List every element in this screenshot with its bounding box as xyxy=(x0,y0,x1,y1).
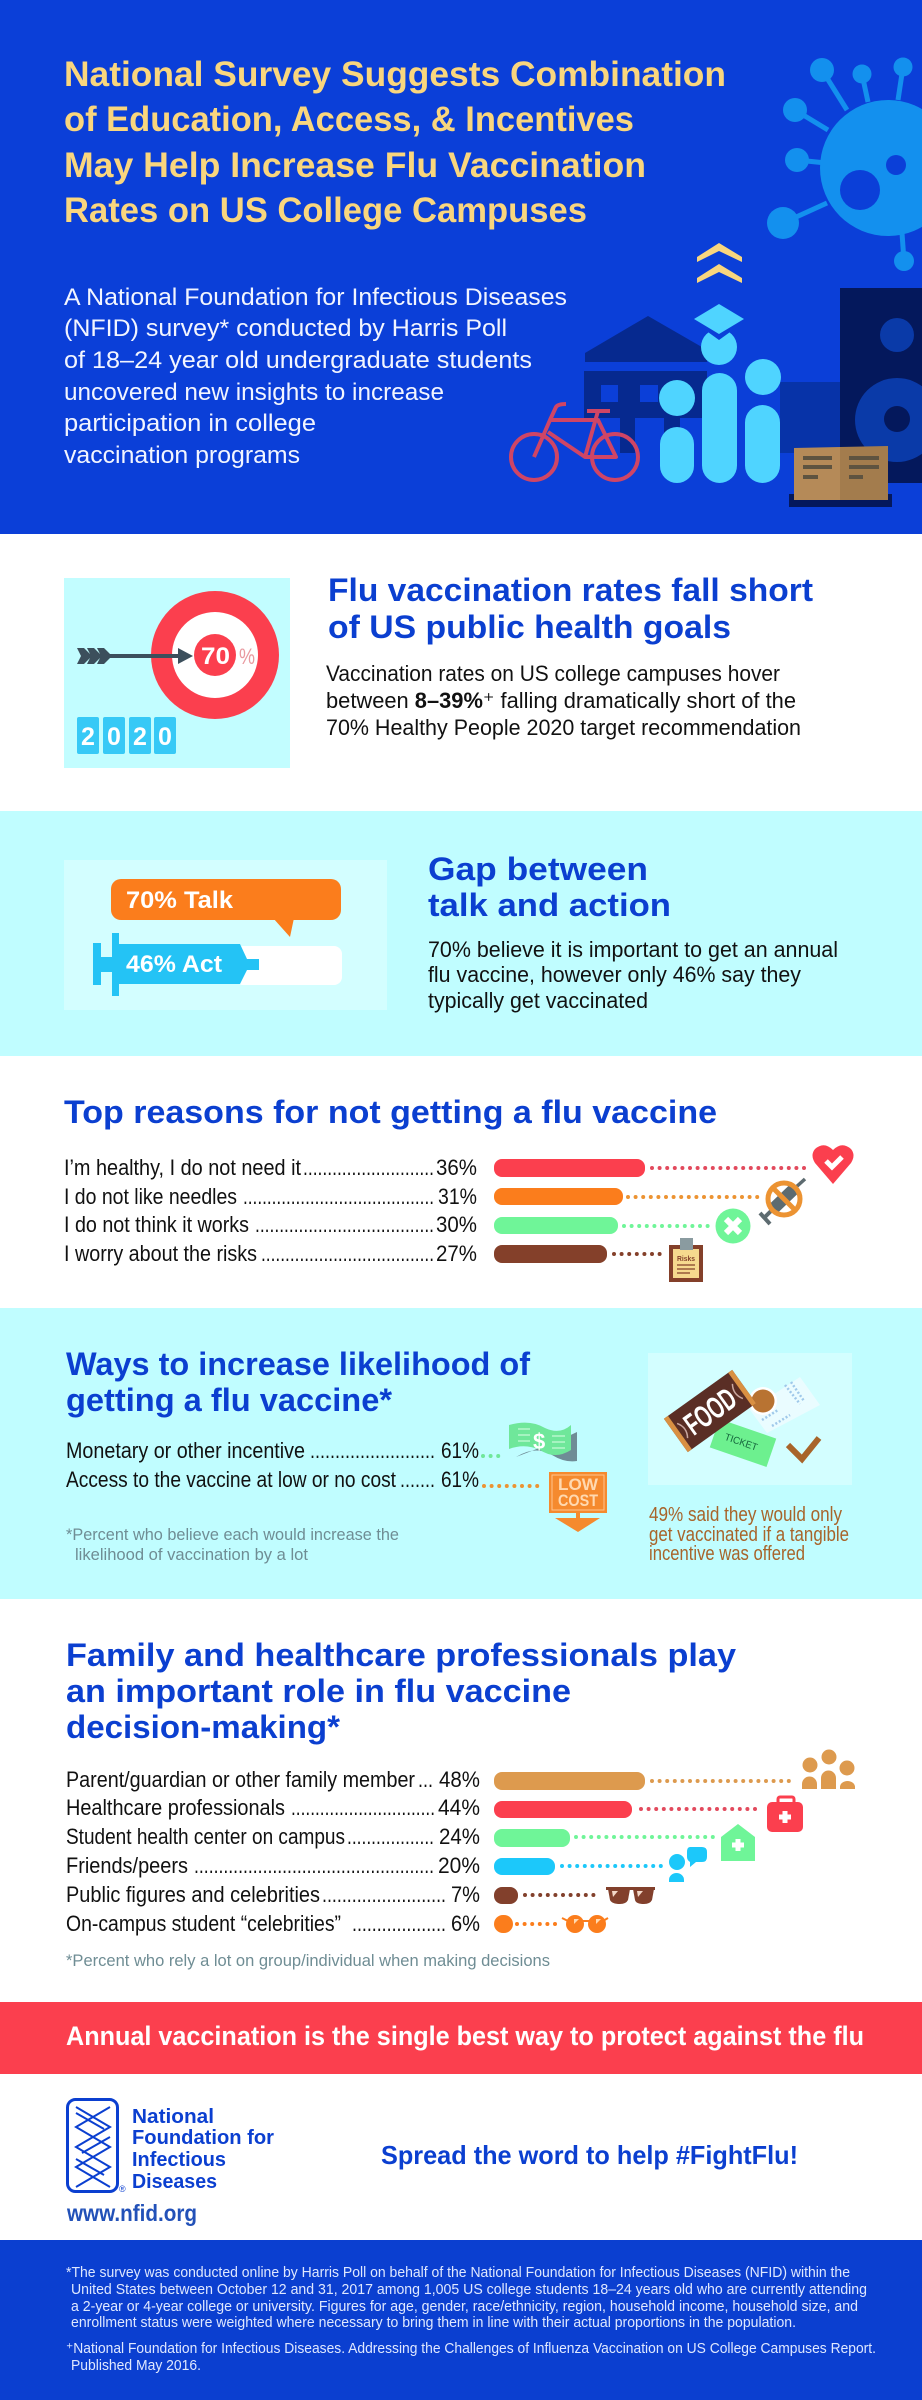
panel: family and healthcare xyxy=(66,1637,855,1970)
text: survey methodology xyxy=(66,2265,867,2331)
list: family: 44% xyxy=(438,1795,480,1820)
icon: target 2020 xyxy=(64,578,290,768)
icon: heart with check xyxy=(812,1145,854,1184)
list: family xyxy=(66,1767,480,1936)
heading: gap xyxy=(428,851,671,923)
icon: low cost sign: LOW xyxy=(558,1475,599,1494)
logo: NFID xyxy=(68,2100,274,2194)
icon: family xyxy=(802,1750,855,1789)
list: family: On-campus student “celebrities” xyxy=(66,1911,341,1936)
icon: virus xyxy=(767,58,922,271)
icon: target 2020: 0 xyxy=(158,723,172,751)
icon: no needle xyxy=(760,1179,805,1224)
banner: annual vaccination xyxy=(0,2002,922,2074)
banner: annual vaccination: Annual vaccination is the single best way to protect against the flu xyxy=(66,2021,864,2051)
heading: family: Family and healthcare professionals play xyxy=(66,1637,736,1673)
list: family: ......................... xyxy=(322,1882,446,1907)
list: ways: Access to the vaccine at low or no cost xyxy=(66,1467,397,1492)
heading: ways: Ways to increase likelihood of xyxy=(66,1346,530,1382)
list: family: ................... xyxy=(352,1911,446,1936)
icon: sunglasses xyxy=(606,1887,655,1904)
list: ways: 61% xyxy=(441,1438,479,1463)
list: reasons: ........................... xyxy=(303,1155,434,1180)
list: ways: ....... xyxy=(400,1467,435,1492)
icon: friends talking xyxy=(669,1847,707,1882)
panel: gap between talk and action xyxy=(0,811,922,1056)
icon: target 2020: 0 xyxy=(107,723,121,751)
list: reasons: .................................... xyxy=(261,1241,434,1266)
footnote: ways: *Percent who believe each would increase the xyxy=(66,1525,399,1544)
icon: risks clipboard xyxy=(669,1238,703,1282)
text: survey methodology: *The survey was conducted online by Harris Poll on behalf of the National Foundation for Infectious Diseases (NFID) within the xyxy=(66,2265,850,2281)
title: National Survey Suggests Combination xyxy=(64,55,726,94)
list: reasons: 30% xyxy=(436,1212,477,1237)
callout: 49 percent: 49% said they would only xyxy=(649,1504,842,1526)
list: family: Healthcare professionals xyxy=(66,1795,285,1820)
panel: hero header xyxy=(0,0,922,534)
list: reasons: 27% xyxy=(436,1241,477,1266)
text: citation: ⁺National Foundation for Infectious Diseases. Addressing the Challenges of Influenza Vaccination on US College Campuses Report. xyxy=(66,2341,876,2357)
icon: target 2020: 2 xyxy=(81,723,95,751)
intro text block: participation in college xyxy=(64,410,316,437)
footnote: family: *Percent who rely a lot on group/individual when making decisions xyxy=(66,1951,550,1970)
bar chart: family xyxy=(494,1772,795,1933)
text: gap xyxy=(428,937,838,1013)
intro text block: uncovered new insights to increase xyxy=(64,379,444,406)
list: reasons xyxy=(64,1155,477,1266)
logo: NFID: Foundation for xyxy=(132,2127,274,2149)
illustration: food and ticket incentives: TICKET xyxy=(723,1432,759,1454)
icon: health center xyxy=(721,1824,755,1861)
call to action: Spread the word to help #FightFlu! xyxy=(381,2140,798,2170)
list: family: ................................................. xyxy=(194,1853,434,1878)
intro text block xyxy=(64,284,567,469)
text: vaccination rates: 70% Healthy People 2020 target recommendation xyxy=(326,715,801,740)
text: citation: Published May 2016. xyxy=(71,2358,201,2374)
footnote: ways: likelihood of vaccination by a lot xyxy=(75,1545,308,1564)
panel: footer xyxy=(0,2240,922,2400)
illustration: food and ticket incentives: FOOD xyxy=(677,1381,743,1442)
icon: target 2020: % xyxy=(239,644,255,669)
list: family: 48% xyxy=(439,1767,480,1792)
heading: vaccination rates: of US public health goals xyxy=(328,609,731,645)
text: citation xyxy=(66,2341,876,2374)
list: reasons: ..................................... xyxy=(255,1212,434,1237)
icon: x mark xyxy=(716,1208,750,1244)
icon: round glasses xyxy=(562,1915,608,1933)
bar chart: reasons xyxy=(494,1159,810,1263)
heading: vaccination rates: Flu vaccination rates fall short xyxy=(328,572,813,608)
footnote: ways xyxy=(66,1525,399,1564)
icon: bicycle xyxy=(511,404,638,480)
callout: 49 percent: incentive was offered xyxy=(649,1543,805,1565)
title: of Education, Access, & Incentives xyxy=(64,100,634,139)
icon: chevrons xyxy=(697,243,742,283)
list: family: 24% xyxy=(439,1824,480,1849)
list: ways: ......................... xyxy=(310,1438,435,1463)
chart: talk and act xyxy=(64,860,387,1010)
list: family: Public figures and celebrities xyxy=(66,1882,320,1907)
list: ways: 61% xyxy=(441,1467,479,1492)
heading: family: an important role in flu vaccine xyxy=(66,1673,571,1709)
heading: family xyxy=(66,1637,736,1745)
list: reasons: I do not think it works xyxy=(64,1212,249,1237)
title: Rates on US College Campuses xyxy=(64,191,587,230)
title xyxy=(64,55,726,230)
heading: gap: talk and action xyxy=(428,887,671,923)
list: family: .................. xyxy=(347,1824,434,1849)
list: ways xyxy=(66,1438,479,1492)
text: vaccination rates xyxy=(326,661,801,740)
panel: vaccination rates xyxy=(64,572,813,768)
callout: 49 percent xyxy=(649,1504,849,1565)
intro text block: vaccination programs xyxy=(64,442,300,469)
text: gap: typically get vaccinated xyxy=(428,988,648,1013)
intro text block: of 18–24 year old undergraduate students xyxy=(64,347,532,374)
icon: open book xyxy=(789,446,892,507)
logo: NFID: ® xyxy=(119,2184,126,2194)
panel: top reasons xyxy=(64,1094,854,1282)
icon: speaker xyxy=(780,288,922,483)
text: vaccination rates: Vaccination rates on US college campuses hover xyxy=(326,661,780,686)
logo: NFID: Diseases xyxy=(132,2171,217,2193)
list: reasons: I’m healthy, I do not need it xyxy=(64,1155,302,1180)
icon: medical kit xyxy=(767,1797,803,1832)
website: www.nfid.org xyxy=(66,2200,197,2226)
list: family: Parent/guardian or other family member xyxy=(66,1767,415,1792)
icon: money xyxy=(509,1423,577,1461)
heading: ways: getting a flu vaccine* xyxy=(66,1382,393,1418)
list: reasons: 31% xyxy=(438,1184,477,1209)
list: family: 7% xyxy=(451,1882,480,1907)
panel: ways to increase likelihood xyxy=(0,1308,922,1599)
logo: NFID: Infectious xyxy=(132,2149,226,2171)
heading: top reasons: Top reasons for not getting a flu vaccine xyxy=(64,1094,717,1130)
list: family: 20% xyxy=(438,1853,480,1878)
heading: gap: Gap between xyxy=(428,851,648,887)
list: reasons: I do not like needles xyxy=(64,1184,237,1209)
list: family: 6% xyxy=(451,1911,480,1936)
chart: talk and act: 46% Act xyxy=(126,951,222,978)
list: family: Student health center on campus xyxy=(66,1824,345,1849)
logo: NFID: National xyxy=(132,2106,214,2128)
list: family: .............................. xyxy=(291,1795,435,1820)
heading: family: decision-making* xyxy=(66,1709,341,1745)
callout: 49 percent: get vaccinated if a tangible xyxy=(649,1524,849,1546)
illustration: food and ticket incentives xyxy=(648,1353,852,1485)
text: survey methodology: a 2-year or 4-year college or university. Figures for age, gender, race/ethnicity, region, household income, household size, and xyxy=(71,2299,858,2315)
text: gap: 70% believe it is important to get an annual xyxy=(428,937,838,962)
icon: target 2020: 2 xyxy=(133,723,147,751)
list: ways: Monetary or other incentive xyxy=(66,1438,305,1463)
list: reasons: 36% xyxy=(436,1155,477,1180)
icon: low cost sign xyxy=(549,1472,607,1532)
icon: money: $ xyxy=(533,1429,545,1454)
heading: vaccination rates xyxy=(328,572,813,645)
text: vaccination rates: between 8–39%⁺ falling dramatically short of the xyxy=(326,688,796,713)
intro text block: (NFID) survey* conducted by Harris Poll xyxy=(64,315,507,342)
intro text block: A National Foundation for Infectious Diseases xyxy=(64,284,567,311)
icon: risks clipboard: Risks xyxy=(677,1256,695,1263)
list: family: Friends/peers xyxy=(66,1853,188,1878)
connectors: ways xyxy=(483,1456,543,1486)
list: reasons: I worry about the risks xyxy=(64,1241,257,1266)
chart: talk and act: 70% Talk xyxy=(126,887,234,914)
list: family: ... xyxy=(418,1767,433,1792)
icon: low cost sign: COST xyxy=(558,1491,599,1510)
heading: ways xyxy=(66,1346,530,1418)
text: survey methodology: United States between October 12 and 31, 2017 among 1,005 US college students 18–24 years old who are currently attending xyxy=(71,2282,867,2298)
text: gap: flu vaccine, however only 46% say they xyxy=(428,962,801,987)
text: survey methodology: enrollment status were weighted where necessary to bring them in line with their actual proportions in the population. xyxy=(71,2315,796,2331)
icon: students xyxy=(659,304,781,483)
icon: campus building xyxy=(584,316,707,453)
icon: target 2020: 70 xyxy=(201,643,230,670)
list: reasons: ........................................ xyxy=(243,1184,434,1209)
title: May Help Increase Flu Vaccination xyxy=(64,146,646,185)
